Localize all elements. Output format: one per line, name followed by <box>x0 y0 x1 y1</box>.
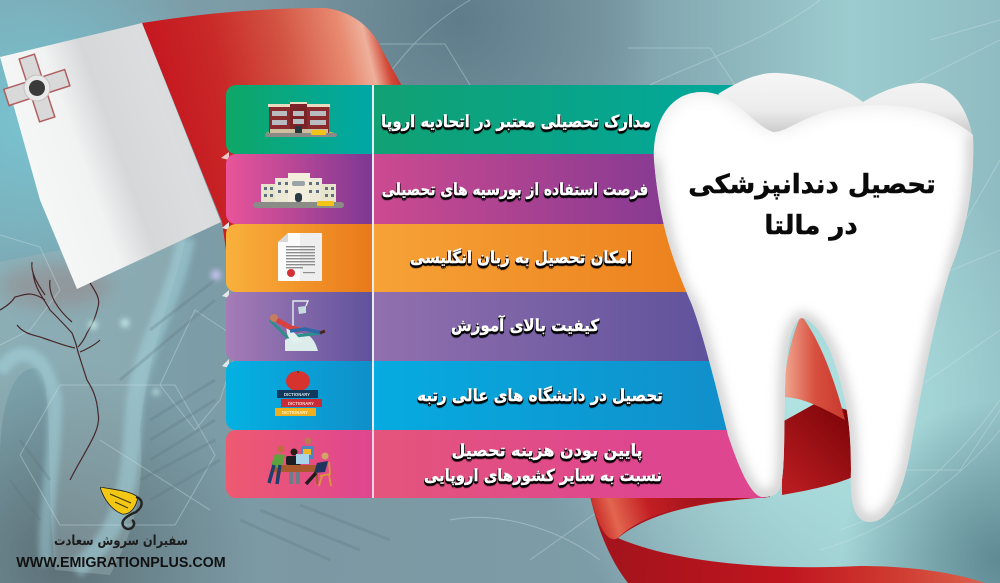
row 4: education quality <box>226 292 710 361</box>
icon: apple on dictionaries: DICTIONARY <box>282 410 308 415</box>
lower red ribbon <box>590 315 985 583</box>
item text 6 line 1: پایین بودن هزینه تحصیل <box>451 441 643 460</box>
Malta flag white field <box>0 23 221 289</box>
icon: winged bird <box>100 487 143 530</box>
small folds at the row joints <box>221 152 229 368</box>
row 3: English study <box>226 224 686 292</box>
icon: white university building <box>253 173 344 208</box>
row 5: top universities <box>226 361 727 430</box>
icon: paper document with seal <box>278 233 322 281</box>
row 2: scholarships <box>226 154 664 224</box>
icon: brick university building <box>265 102 337 137</box>
red ribbon behind the panels, top <box>142 8 403 250</box>
item text 1: مدارک تحصیلی معتبر در اتحادیه اروپا <box>381 112 651 131</box>
row 1: European accredited degrees <box>226 85 734 154</box>
tooth illustration <box>654 72 974 522</box>
ghost tooth outline in the background <box>0 238 186 575</box>
row 6: low tuition <box>226 430 766 498</box>
item text 4: کیفیت بالای آموزش <box>451 316 599 335</box>
George Cross emblem <box>0 47 78 129</box>
website address: WWW.EMIGRATIONPLUS.COM <box>16 555 226 571</box>
title line 1 on the tooth: تحصیل دندانپزشکی <box>688 170 936 200</box>
icon: apple on dictionaries: DICTIONARY <box>284 392 310 397</box>
title line 2 on the tooth: در مالتا <box>764 211 858 241</box>
item text 5: تحصیل در دانشگاه های عالی رتبه <box>417 386 663 405</box>
nerve branches <box>0 262 100 480</box>
item text 6 line 2: نسبت به سایر کشورهای اروپایی <box>424 466 662 485</box>
icon: apple on dictionaries: DICTIONARY <box>288 401 314 406</box>
icon: patient in dental chair <box>270 301 325 351</box>
icon: apple on dictionaries <box>275 371 322 416</box>
item text 2: فرصت استفاده از بورسیه های تحصیلی <box>382 180 648 199</box>
glow sparks <box>89 270 221 395</box>
item text 3: امکان تحصیل به زبان انگلیسی <box>410 248 632 267</box>
logo Persian name: سفیران سروش سعادت <box>54 533 188 549</box>
icon: team around a table <box>269 438 331 486</box>
company logo <box>16 487 226 571</box>
